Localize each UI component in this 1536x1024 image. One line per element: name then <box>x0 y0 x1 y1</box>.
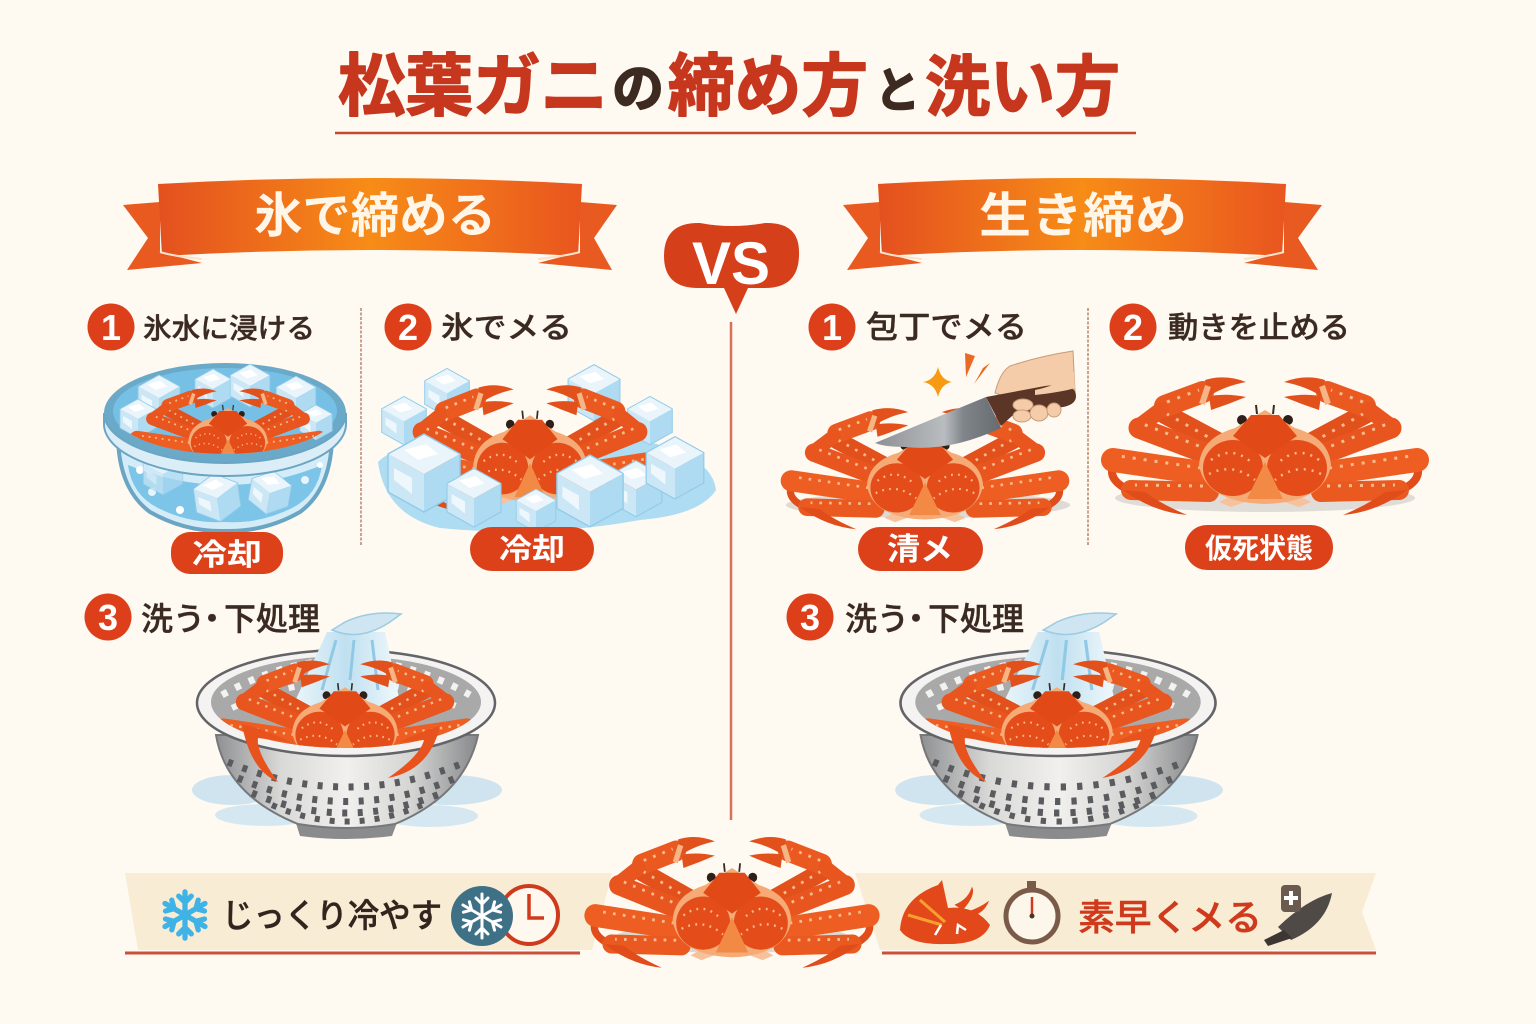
step 3: 洗う・下処理 (left): 洗う <box>141 601 205 637</box>
step 3: 洗う・下処理 (left): 下処理 <box>224 601 320 637</box>
illustration: centre crab <box>594 837 870 968</box>
illustration: still crab <box>1112 377 1418 515</box>
icon: red fish-like mark <box>900 880 990 944</box>
step 3: 洗う・下処理 (left) <box>84 594 320 640</box>
title: と <box>875 65 920 118</box>
badge: 仮死状態: 仮死状態 <box>1205 533 1313 564</box>
step 3: 洗う・下処理 (left): 3 <box>98 597 118 638</box>
illustration: crab washed in colander (right) <box>895 613 1223 839</box>
step 2: 動きを止める <box>1110 304 1350 350</box>
bottom band: left summary <box>125 873 612 953</box>
VS speech bubble <box>664 223 799 314</box>
icon: stopwatch <box>1006 881 1058 942</box>
bottom band: right summary <box>855 873 1376 953</box>
badge: 仮死状態 <box>1185 525 1333 570</box>
illustration: crab in glass bowl of ice water <box>104 363 346 531</box>
ribbon: right heading 生き締め <box>843 178 1322 270</box>
title: 洗い方 <box>925 50 1120 124</box>
title: 締め方 <box>668 49 868 125</box>
icon: knife with plus tag <box>1264 885 1332 946</box>
icon: clock <box>500 886 558 944</box>
badge: 冷却 <box>171 532 283 574</box>
icon: snowflake <box>162 892 208 938</box>
title: の <box>612 61 664 119</box>
step 1: 包丁でメる: 1 <box>822 307 842 348</box>
badge: 冷却 <box>470 527 594 571</box>
ribbon: left heading 氷で締める <box>123 178 617 270</box>
step 3: 洗う・下処理 (right): 洗う <box>845 601 909 637</box>
step 1: 氷水に浸ける: 1 <box>101 307 121 348</box>
step 3: 洗う・下処理 (right): ・ <box>900 601 932 637</box>
step 1: 氷水に浸ける: 氷水に浸ける <box>143 313 315 344</box>
illustration: crab washed in colander (left) <box>192 613 502 839</box>
badge: 清メ <box>858 527 983 571</box>
ribbon: right heading 生き締め: 生き締め <box>979 190 1187 243</box>
step 2: 動きを止める: 動きを止める <box>1168 312 1350 345</box>
step 1: 氷水に浸ける <box>88 304 315 350</box>
step 3: 洗う・下処理 (right): 3 <box>800 597 820 638</box>
title <box>338 49 1120 125</box>
step 3: 洗う・下処理 (left): ・ <box>196 601 228 637</box>
step 1: 包丁でメる <box>808 304 1027 350</box>
step 2: 氷でメる <box>384 304 572 350</box>
bottom band: left summary: じっくり冷やす <box>222 897 442 934</box>
illustration: knife and hand on crab <box>786 351 1076 529</box>
bottom band: right summary: 素早くメる <box>1078 897 1262 938</box>
badge: 清メ: 清メ <box>887 532 953 567</box>
badge: 冷却: 冷却 <box>192 539 262 572</box>
title: 松葉ガニ <box>338 49 608 125</box>
icon: snowflake badge <box>451 886 513 946</box>
badge: 冷却: 冷却 <box>499 534 565 567</box>
step 3: 洗う・下処理 (right) <box>786 594 1024 640</box>
illustration: crab surrounded by ice cubes <box>378 365 716 532</box>
step 1: 包丁でメる: 包丁でメる <box>866 310 1027 345</box>
ribbon: left heading 氷で締める: 氷で締める <box>254 190 496 243</box>
step 2: 氷でメる: 氷でメる <box>441 312 572 345</box>
VS speech bubble: VS <box>692 230 770 297</box>
step 2: 氷でメる: 2 <box>398 307 418 348</box>
step 2: 動きを止める: 2 <box>1123 307 1143 348</box>
step 3: 洗う・下処理 (right): 下処理 <box>928 601 1024 637</box>
